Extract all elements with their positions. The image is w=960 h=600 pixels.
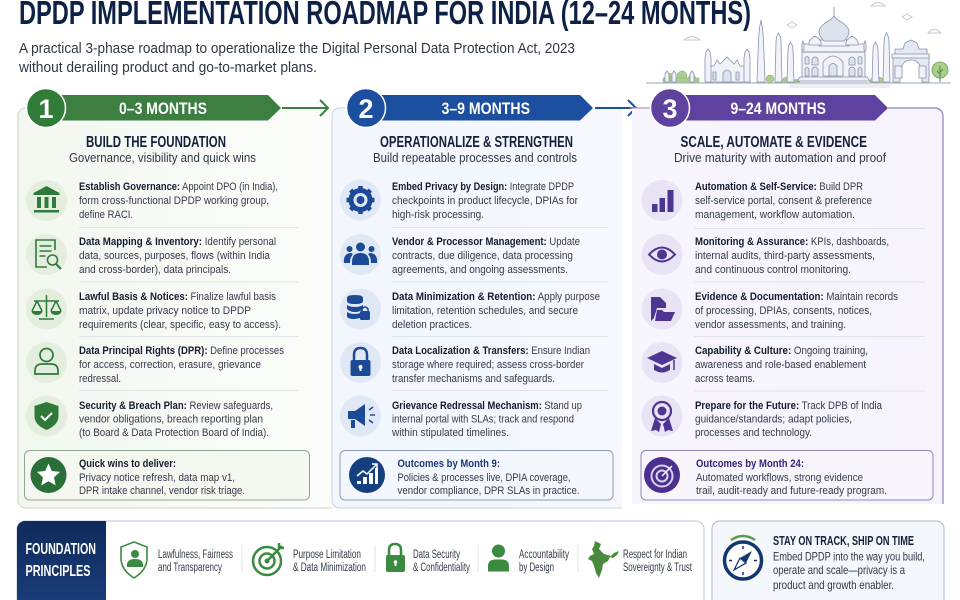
text: future: Prepare for the Future: Track DPB of India bbox=[695, 400, 883, 412]
text: purpose bbox=[293, 549, 366, 574]
text: automation: Automation & Self-Service: Build DPR bbox=[695, 181, 863, 193]
phase number bbox=[346, 88, 386, 128]
icon: target bbox=[644, 457, 680, 493]
text: sovereignty bbox=[623, 549, 693, 574]
text: localization: Data Localization & Transfers: Ensure Indian bbox=[392, 345, 590, 357]
box bbox=[712, 521, 944, 600]
text: vendor: contracts, due diligence, data processing bbox=[392, 250, 573, 262]
text: vendor: Vendor & Processor Management: Update bbox=[392, 236, 580, 248]
text: data principal rights: Data Principal Rights (DPR): Define processes bbox=[79, 345, 284, 357]
panel: phase 2 bbox=[332, 88, 636, 508]
callout: outcomes month 9 bbox=[340, 450, 613, 500]
phase number bbox=[650, 88, 690, 128]
icon: eye bbox=[642, 234, 682, 275]
text: stay on track bbox=[773, 533, 925, 592]
subtitle: A practical 3-phase roadmap to operationalize the Digital Personal Data Protection Act, 2023 bbox=[19, 41, 575, 57]
phase banner bbox=[55, 95, 281, 120]
arrow bbox=[595, 100, 636, 116]
text: monitoring bbox=[695, 236, 889, 276]
text: data principal rights bbox=[79, 345, 284, 385]
text: data mapping: and cross-border), data principals. bbox=[79, 264, 231, 276]
callout text: Outcomes by Month 24: bbox=[696, 458, 804, 470]
heading: SCALE, AUTOMATE & EVIDENCE bbox=[680, 134, 867, 151]
arrow bbox=[282, 100, 328, 116]
callout text: Privacy notice refresh, data map v1, bbox=[79, 472, 235, 484]
text: purpose: & Data Minimization bbox=[293, 562, 366, 574]
icon: document folder bbox=[642, 288, 682, 330]
text: automation: self-service portal, consent & preference bbox=[695, 195, 872, 207]
icon: people bbox=[340, 234, 381, 275]
text: lawfulness: Lawfulness, Fairness bbox=[158, 549, 233, 561]
icon: growth chart bbox=[349, 457, 385, 493]
text: monitoring: Monitoring & Assurance: KPIs, dashboards, bbox=[695, 236, 889, 248]
icon: scales bbox=[26, 288, 67, 330]
label text: FOUNDATION bbox=[26, 541, 96, 558]
phase number: 1 bbox=[38, 94, 54, 124]
subtitle bbox=[18, 41, 575, 76]
text: minimization: Data Minimization & Retention: Apply purpose bbox=[392, 291, 600, 303]
text: establish governance: define RACI. bbox=[79, 209, 133, 221]
heading: OPERATIONALIZE & STRENGTHEN bbox=[380, 134, 573, 151]
phase banner bbox=[680, 95, 888, 120]
callout text: trail, audit-ready and future-ready program. bbox=[696, 485, 887, 497]
text: establish governance bbox=[79, 181, 278, 221]
icon: data mapping bbox=[26, 234, 67, 275]
text: embed privacy bbox=[392, 181, 578, 221]
text: evidence: Evidence & Documentation: Maintain records bbox=[695, 291, 898, 303]
text: establish governance: form cross-functional DPDP working group, bbox=[79, 195, 269, 207]
icon: gear bbox=[340, 180, 381, 220]
phase number: 3 bbox=[662, 94, 678, 124]
sub heading: Drive maturity with automation and proof bbox=[674, 151, 886, 165]
panel background bbox=[18, 108, 334, 508]
icon: governance bbox=[26, 180, 67, 221]
text: stay on track: operate and scale—privacy is a bbox=[773, 563, 905, 577]
sub heading: Governance, visibility and quick wins bbox=[69, 151, 256, 165]
text: evidence bbox=[695, 291, 898, 331]
panel: phase 1 bbox=[18, 88, 334, 508]
icon: lock bbox=[386, 544, 405, 572]
text: lawful basis bbox=[79, 291, 281, 331]
panel: stay on track bbox=[712, 521, 944, 600]
phase number bbox=[26, 88, 66, 128]
text: data principal rights: for access, correction, erasure, grievance bbox=[79, 359, 261, 371]
principles box bbox=[17, 521, 704, 600]
text: establish governance: Establish Governance: Appoint DPO (in India), bbox=[79, 181, 278, 193]
text: security: Security & Breach Plan: Review safeguards, bbox=[79, 400, 273, 412]
callout text: Quick wins to deliver: bbox=[79, 458, 176, 470]
callout text: Outcomes by Month 9: bbox=[398, 458, 500, 470]
callout: quick wins bbox=[24, 450, 310, 500]
text: purpose: Purpose Limitation bbox=[293, 549, 361, 561]
banner text: 0–3 MONTHS bbox=[119, 100, 207, 118]
subtitle: without derailing product and go-to-market plans. bbox=[18, 60, 317, 76]
icon: shield person bbox=[121, 542, 147, 578]
icon: award ribbon bbox=[642, 396, 682, 436]
text: future: processes and technology. bbox=[695, 427, 812, 439]
phase banner bbox=[375, 95, 593, 120]
text: future bbox=[695, 400, 883, 439]
text: security: (to Board & Data Protection Board of India). bbox=[79, 427, 269, 439]
panel: phase 3 bbox=[630, 88, 943, 508]
icon: database lock bbox=[340, 288, 381, 330]
text: monitoring: and continuous control monitoring. bbox=[695, 264, 851, 276]
callout text bbox=[696, 458, 887, 497]
text: stay on track: product and growth enabler. bbox=[773, 578, 894, 592]
text: data principal rights: redressal. bbox=[79, 373, 121, 385]
label text: PRINCIPLES bbox=[26, 563, 91, 580]
text: sovereignty: Respect for Indian bbox=[623, 549, 687, 561]
text: accountability: by Design bbox=[519, 562, 554, 574]
callout text: Policies & processes live, DPIA coverage, bbox=[398, 472, 570, 484]
callout text bbox=[79, 458, 245, 497]
banner text: 3–9 MONTHS bbox=[442, 100, 530, 118]
text: security bbox=[79, 400, 273, 439]
text: lawful basis: Lawful Basis & Notices: Finalize lawful basis bbox=[79, 291, 276, 303]
navy label block bbox=[17, 521, 106, 600]
text: localization bbox=[392, 345, 590, 385]
icon: star bbox=[30, 457, 66, 493]
text: lawful basis: requirements (clear, specific, easy to access). bbox=[79, 319, 281, 331]
text: capability: Capability & Culture: Ongoing training, bbox=[695, 345, 868, 357]
text: embed privacy: high-risk processing. bbox=[392, 209, 484, 221]
panel background bbox=[332, 108, 622, 508]
text: automation bbox=[695, 181, 872, 221]
text: lawfulness bbox=[158, 549, 233, 574]
icon: person bbox=[26, 342, 67, 383]
text: minimization: limitation, retention schedules, and secure bbox=[392, 305, 578, 317]
callout text: vendor compliance, DPR SLAs in practice. bbox=[398, 485, 580, 497]
icon: lock bbox=[340, 342, 381, 383]
text: vendor: agreements, and ongoing assessments. bbox=[392, 264, 568, 276]
text: future: guidance/standards; adapt policies, bbox=[695, 414, 852, 426]
icon: graduation cap bbox=[642, 342, 682, 383]
icon: India map bbox=[588, 541, 619, 578]
icon: bar chart bbox=[642, 180, 682, 221]
heading: BUILD THE FOUNDATION bbox=[86, 134, 226, 151]
text: localization: transfer mechanisms and safeguards. bbox=[392, 373, 555, 385]
text: data security bbox=[413, 549, 470, 574]
text: lawful basis: matrix, update privacy notice to DPDP bbox=[79, 305, 251, 317]
text: grievance bbox=[391, 400, 582, 439]
callout: outcomes month 24 bbox=[641, 450, 933, 500]
label text bbox=[26, 541, 96, 580]
text: monitoring: internal audits, third-party assessments, bbox=[695, 250, 875, 262]
icon: shield bbox=[26, 396, 67, 436]
text: capability bbox=[695, 345, 868, 385]
icon: megaphone bbox=[340, 396, 381, 436]
text: accountability: Accountability bbox=[519, 549, 569, 561]
sub heading: Build repeatable processes and controls bbox=[373, 151, 577, 165]
text: evidence: vendor assessments, and training. bbox=[695, 319, 846, 331]
text: embed privacy: Embed Privacy by Design: Integrate DPDP bbox=[392, 181, 574, 193]
callout text: DPR intake channel, vendor risk triage. bbox=[79, 485, 245, 497]
callout text: Automated workflows, strong evidence bbox=[696, 472, 863, 484]
text: accountability bbox=[519, 549, 569, 574]
text: lawfulness: and Transparency bbox=[158, 562, 222, 574]
text: grievance: Grievance Redressal Mechanism: Stand up bbox=[392, 400, 582, 412]
text: evidence: of processing, DPIAs, consents, notices, bbox=[695, 305, 872, 317]
illustration: India skyline bbox=[646, 2, 951, 88]
icon: target arrow bbox=[253, 543, 284, 575]
text: automation: management, workflow automation. bbox=[695, 209, 855, 221]
text: capability: awareness and role-based enablement bbox=[695, 359, 867, 371]
text: embed privacy: checkpoints in product lifecycle, DPIAs for bbox=[392, 195, 578, 207]
text: grievance: internal portal with SLAs; track and respond bbox=[392, 414, 574, 426]
text: data mapping: data, sources, purposes, flows (within India bbox=[79, 250, 271, 262]
banner text: 9–24 MONTHS bbox=[730, 100, 826, 118]
panel: foundation principles bbox=[17, 521, 704, 600]
text: data security: & Confidentiality bbox=[413, 562, 470, 574]
icon: compass bbox=[724, 536, 762, 579]
text: sovereignty: Sovereignty & Trust bbox=[623, 562, 693, 574]
callout text bbox=[398, 458, 580, 497]
icon: person bbox=[488, 544, 509, 572]
text: data mapping bbox=[79, 236, 276, 276]
text: minimization bbox=[392, 291, 600, 331]
text: security: vendor obligations, breach reporting plan bbox=[79, 414, 263, 426]
text: vendor bbox=[392, 236, 580, 276]
text: minimization: deletion practices. bbox=[392, 319, 472, 331]
text: data security: Data Security bbox=[413, 549, 460, 561]
phase number: 2 bbox=[358, 94, 374, 124]
text: grievance: within stipulated timelines. bbox=[391, 427, 509, 439]
text: capability: across teams. bbox=[695, 373, 755, 385]
text: data mapping: Data Mapping & Inventory: Identify personal bbox=[79, 236, 276, 248]
text: localization: storage where required; assess cross-border bbox=[392, 359, 584, 371]
panel background bbox=[632, 108, 943, 508]
